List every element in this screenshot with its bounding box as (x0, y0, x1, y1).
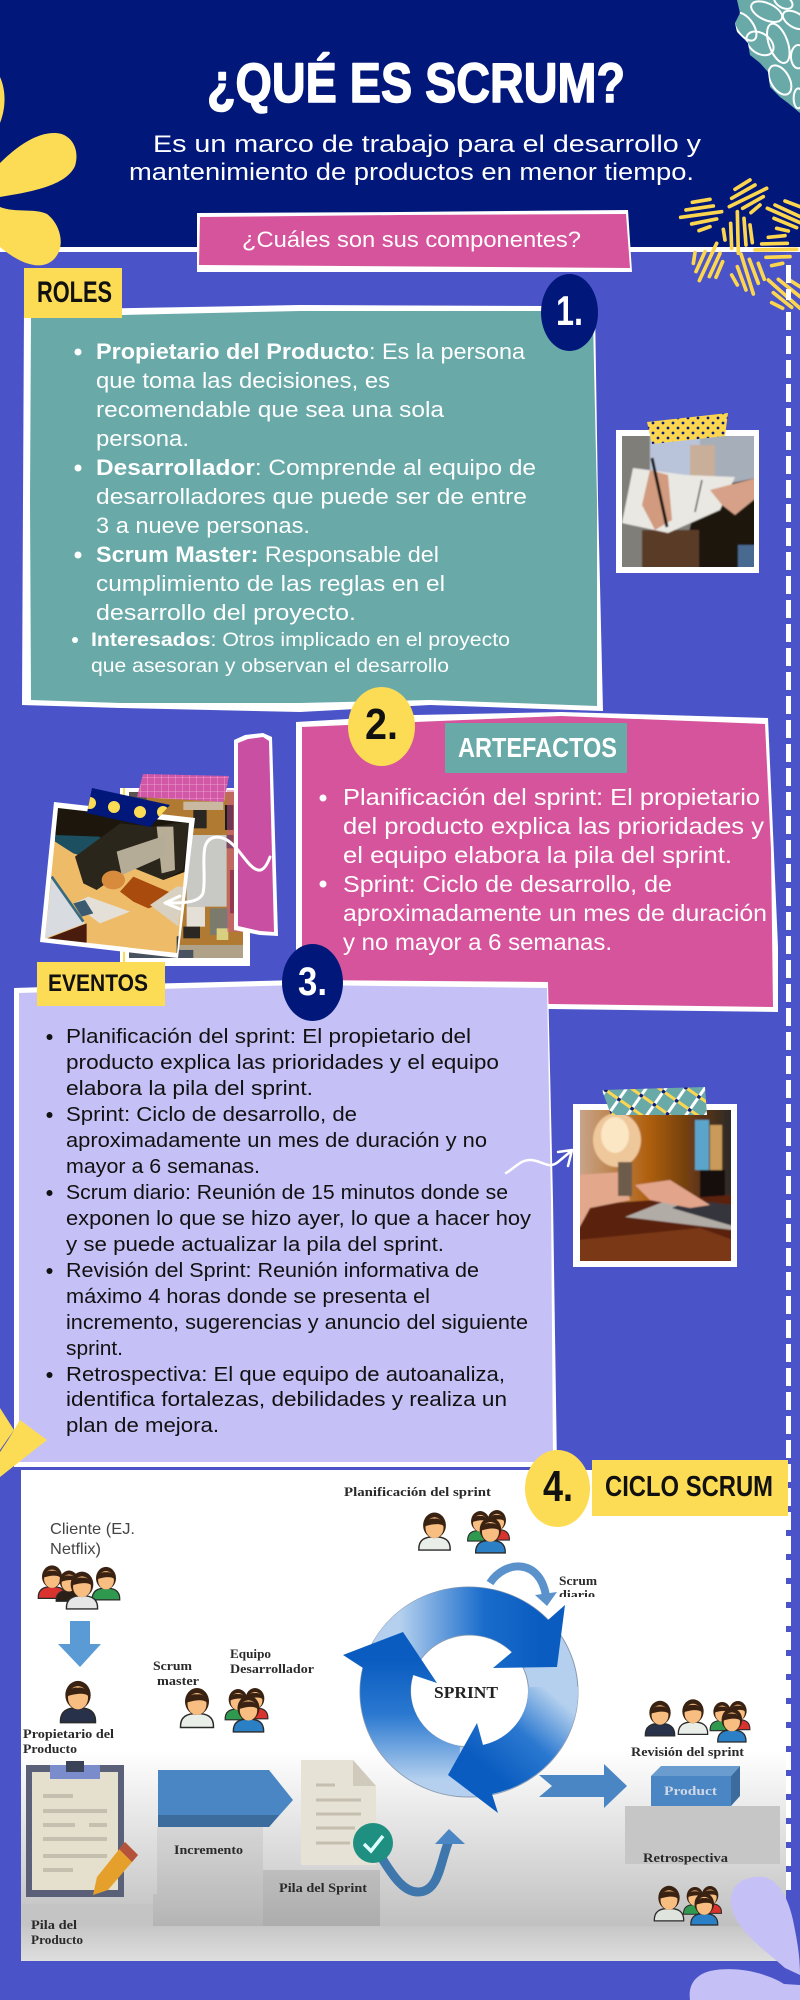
heading: artefactos (445, 723, 627, 773)
arrow: top right (373, 1587, 565, 1668)
eventos bullet list: plan de mejora. (66, 1415, 219, 1437)
label: propietario del producto: Producto (23, 1742, 77, 1756)
icon: planning people (419, 1510, 509, 1553)
title: ¿QUÉ ES SCRUM? (207, 51, 625, 114)
photo: hands with documents front (40, 802, 197, 960)
sprint cycle ring (343, 1587, 578, 1813)
tape: pink grid (137, 774, 229, 802)
label: scrum master (153, 1659, 200, 1688)
heading: artefactos: ARTEFACTOS (458, 732, 617, 763)
label: cliente (50, 1521, 135, 1558)
eventos bullet list: Retrospectiva: El que equipo de autoanaliza, (66, 1364, 505, 1386)
icon: product box: Product (664, 1783, 718, 1798)
eventos bullet list: Planificación del sprint: El propietario del (66, 1026, 471, 1048)
banner: components question (197, 210, 632, 272)
number badge 3 (282, 944, 343, 1021)
decoration: teal patterned blob top right (729, 0, 800, 113)
label: propietario del producto (23, 1727, 115, 1756)
icon: scrum master person (180, 1688, 214, 1728)
arrow: white curved arrow (165, 837, 270, 909)
label: equipo desarrollador: Equipo (230, 1647, 271, 1661)
panel: eventos (14, 980, 557, 1467)
washi tape: yellow dots (647, 413, 728, 444)
number badge 1: 1. (556, 287, 583, 334)
label: pila del producto: Producto (31, 1933, 83, 1947)
roles bullet list: Interesados : Otros implicado en el proyecto (91, 630, 510, 651)
eventos bullet list: sprint. (66, 1338, 123, 1360)
artefactos bullet list: aproximadamente un mes de duración (343, 900, 767, 926)
icon: product owner (61, 1681, 95, 1723)
label: scrum diario: diario (559, 1588, 595, 1602)
eventos bullet list: producto explica las prioridades y el equipo (66, 1052, 499, 1074)
photo collage: office pictures (40, 733, 278, 966)
artefactos bullet list: el equipo elabora la pila del sprint. (343, 842, 732, 868)
roles bullet list: 3 a nueve personas. (96, 513, 310, 538)
panel: roles (22, 305, 603, 712)
icon: development team (225, 1688, 268, 1732)
label: cliente: Netflix) (50, 1541, 101, 1558)
roles bullet list: Desarrollador : Comprende al equipo de (96, 455, 536, 480)
washi tape: plaid (602, 1087, 707, 1115)
eventos bullet list: Sprint: Ciclo de desarrollo, de (66, 1104, 357, 1126)
photo: light bulb and laptop (506, 1087, 737, 1267)
tape: tall pink strip (227, 733, 278, 936)
heading: ciclo scrum (592, 1460, 788, 1516)
eventos bullet list: Revisión del Sprint: Reunión informativa de (66, 1260, 479, 1282)
artefactos bullet list: y no mayor a 6 semanas. (343, 929, 612, 955)
label: cliente: Cliente (EJ. (50, 1521, 135, 1538)
decoration: yellow diamonds left (0, 1408, 47, 1477)
photo: writing in notebook (616, 413, 759, 573)
number badge 2: 2. (365, 700, 398, 749)
eventos bullet list: Scrum diario: Reunión de 15 minutos donde se (66, 1182, 508, 1204)
banner: components question: ¿Cuáles son sus componentes? (242, 227, 581, 252)
header background: navy band (0, 0, 800, 252)
photo: cork board back (120, 788, 250, 966)
icon: green check (353, 1823, 393, 1863)
label: pila del producto: Pila del (31, 1918, 78, 1932)
roles bullet list (72, 339, 536, 677)
step blocks (21, 1806, 780, 1926)
icon: clipboard and pencil (26, 1761, 138, 1897)
roles bullet list: que asesoran y observan el desarrollo (91, 656, 449, 677)
number badge 3: 3. (298, 960, 327, 1004)
icon: client group (38, 1565, 120, 1609)
icon: retrospective people (654, 1886, 721, 1925)
tape: navy smileys (84, 788, 170, 827)
arrow: down (58, 1621, 101, 1667)
roles bullet list: recomendable que sea una sola (96, 397, 445, 422)
roles bullet list: Propietario del Producto : Es la persona (96, 339, 526, 364)
label: scrum master: Scrum (153, 1659, 193, 1673)
roles bullet list: que toma las decisiones, es (96, 368, 390, 393)
label: scrum diario: Scrum (559, 1574, 598, 1588)
heading: eventos: EVENTOS (48, 970, 148, 997)
label: incremento: Incremento (174, 1843, 243, 1857)
roles bullet list: persona. (96, 426, 189, 451)
arrow: curved from check to sprint (380, 1829, 465, 1892)
icon: sprint document (301, 1760, 376, 1865)
roles bullet list: desarrolladores que puede ser de entre (96, 484, 527, 509)
label: scrum diario (560, 1576, 597, 1597)
eventos bullet list: mayor a 6 semanas. (66, 1156, 260, 1178)
dashed vertical line (786, 265, 791, 1895)
arrow: blue increment block (158, 1770, 293, 1827)
label: retrospectiva: Retrospectiva (643, 1851, 729, 1865)
eventos bullet list: exponen lo que se hizo ayer, lo que a hacer hoy (66, 1208, 531, 1230)
decoration: yellow dash clusters (681, 180, 800, 308)
label: scrum master: master (157, 1674, 200, 1688)
arrow: to product (539, 1764, 627, 1808)
eventos bullet list: elabora la pila del sprint. (66, 1078, 313, 1100)
panel: artefactos (296, 712, 778, 1012)
artefactos bullet list: del producto explica las prioridades y (343, 813, 765, 839)
artefactos bullet list: Planificación del sprint: El propietario (343, 784, 760, 810)
number badge 4: 4. (543, 1462, 573, 1511)
decoration: lavender flower bottom right (690, 1877, 800, 2000)
artefactos bullet list (320, 784, 767, 955)
label: planificacion del sprint: Planificación del sprint (344, 1485, 492, 1499)
arrow: bottom (448, 1687, 578, 1813)
arrow: white squiggle (506, 1150, 572, 1173)
roles bullet list: Scrum Master: Responsable del (96, 542, 439, 567)
number badge 2 (348, 687, 415, 766)
eventos bullet list: aproximadamente un mes de duración y no (66, 1130, 487, 1152)
eventos bullet list: máximo 4 horas donde se presenta el (66, 1286, 430, 1308)
icon: product box (651, 1766, 740, 1806)
number badge 4 (525, 1450, 590, 1527)
label: equipo desarrollador: Desarrollador (230, 1662, 314, 1676)
label: equipo desarrollador (230, 1647, 314, 1676)
eventos bullet list: incremento, sugerencias y anuncio del siguiente (66, 1312, 528, 1334)
icon: review people (645, 1699, 750, 1742)
label: pila del producto (31, 1918, 83, 1947)
label: revision del sprint: Revisión del sprint (631, 1745, 745, 1759)
heading: eventos (37, 962, 165, 1006)
heading: roles (24, 268, 122, 318)
diagram: scrum cycle (21, 1470, 786, 1961)
roles bullet list: cumplimiento de las reglas en el (96, 571, 445, 596)
subtitle (129, 131, 701, 186)
arrow: left (343, 1632, 460, 1796)
eventos bullet list: identifica fortalezas, debilidades y realiza un (66, 1389, 507, 1411)
heading: roles: ROLES (37, 276, 112, 309)
decoration: yellow flower left (0, 77, 76, 265)
eventos bullet list: y se puede actualizar la pila del sprint. (66, 1234, 444, 1256)
label: pila del sprint: Pila del Sprint (279, 1881, 368, 1895)
subtitle: mantenimiento de productos en menor tiempo. (129, 159, 694, 186)
label: sprint: SPRINT (434, 1683, 499, 1702)
label: propietario del producto: Propietario del (23, 1727, 115, 1741)
arrow: daily scrum loop (490, 1566, 557, 1606)
eventos bullet list (46, 1026, 531, 1437)
subtitle: Es un marco de trabajo para el desarrollo y (153, 131, 701, 158)
artefactos bullet list: Sprint: Ciclo de desarrollo, de (343, 871, 672, 897)
number badge 1 (541, 274, 598, 351)
roles bullet list: desarrollo del proyecto. (96, 600, 356, 625)
